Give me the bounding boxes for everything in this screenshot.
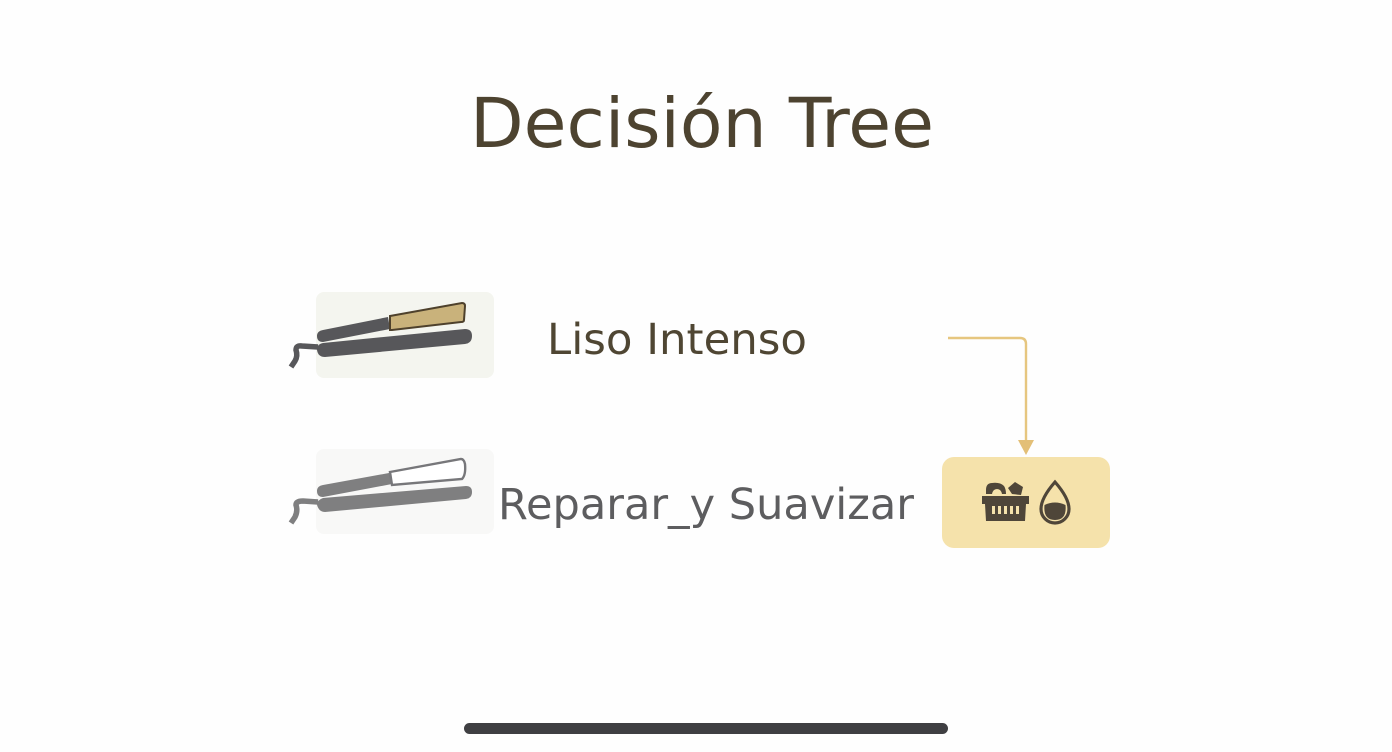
label: Liso Intenso: Liso Intenso [547, 315, 807, 365]
panel: product result box [942, 457, 1110, 548]
row: Reparar y Suavizar option [291, 449, 914, 534]
title: Decisión Tree [470, 84, 934, 164]
row: Liso Intenso option [291, 292, 807, 378]
arrow: Liso Intenso to product box [948, 338, 1034, 455]
icon: water drop [1041, 482, 1069, 523]
icon: flat iron, gold plate [291, 292, 494, 378]
icon: flat iron, outline plate [291, 449, 494, 534]
icon: basket [982, 482, 1029, 521]
home indicator bar [464, 723, 948, 734]
label: Reparar y Suavizar: Reparar_y Suavizar [498, 480, 914, 530]
